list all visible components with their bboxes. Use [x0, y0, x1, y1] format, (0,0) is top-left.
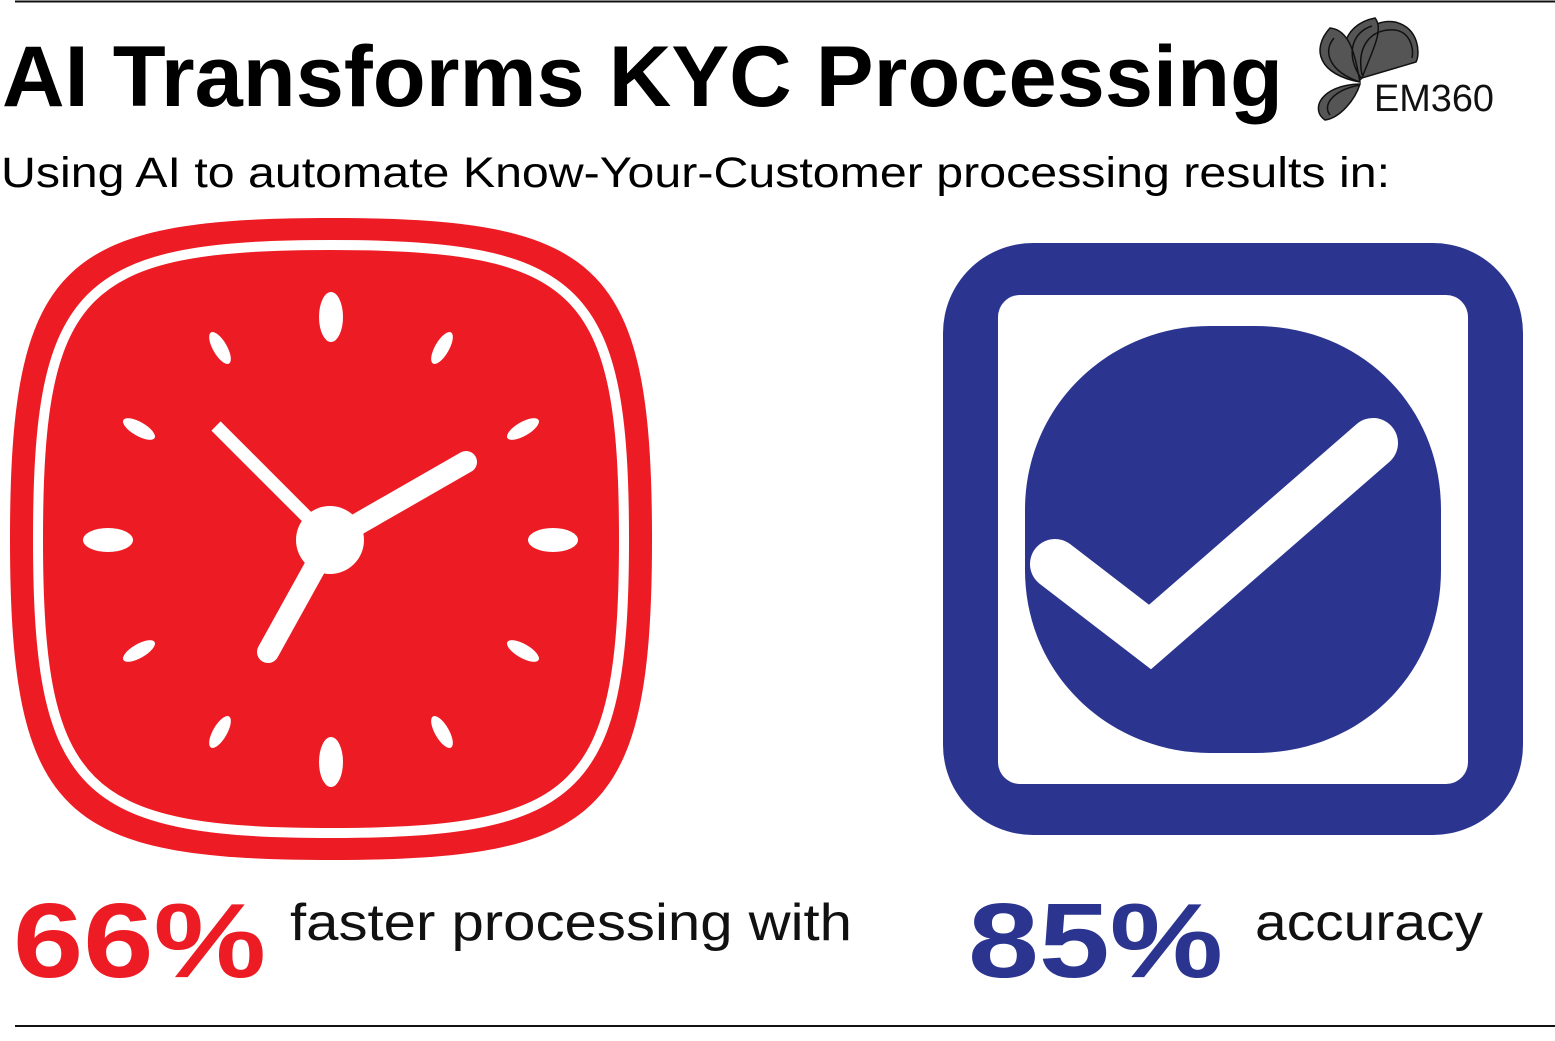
stat: 66%: faster processing with — [290, 894, 852, 952]
logo: EM360 — [1318, 18, 1494, 120]
stat: 66%: 66% — [13, 882, 266, 1000]
stat: 66% — [13, 882, 852, 1000]
icon: clock — [10, 218, 652, 860]
clock hands — [216, 426, 466, 652]
stat: 85%: 85% — [968, 882, 1223, 1000]
check mark — [1055, 443, 1373, 637]
subtitle: Using AI to automate Know-Your-Customer processing results in: — [1, 149, 1390, 197]
title: AI Transforms KYC Processing — [2, 29, 1283, 125]
stat: 85%: accuracy — [1255, 894, 1483, 952]
clock ticks — [83, 292, 578, 787]
logo: EM360: EM360 — [1374, 78, 1494, 120]
stat: 85% — [968, 882, 1483, 1000]
icon: checkbox — [943, 243, 1523, 835]
